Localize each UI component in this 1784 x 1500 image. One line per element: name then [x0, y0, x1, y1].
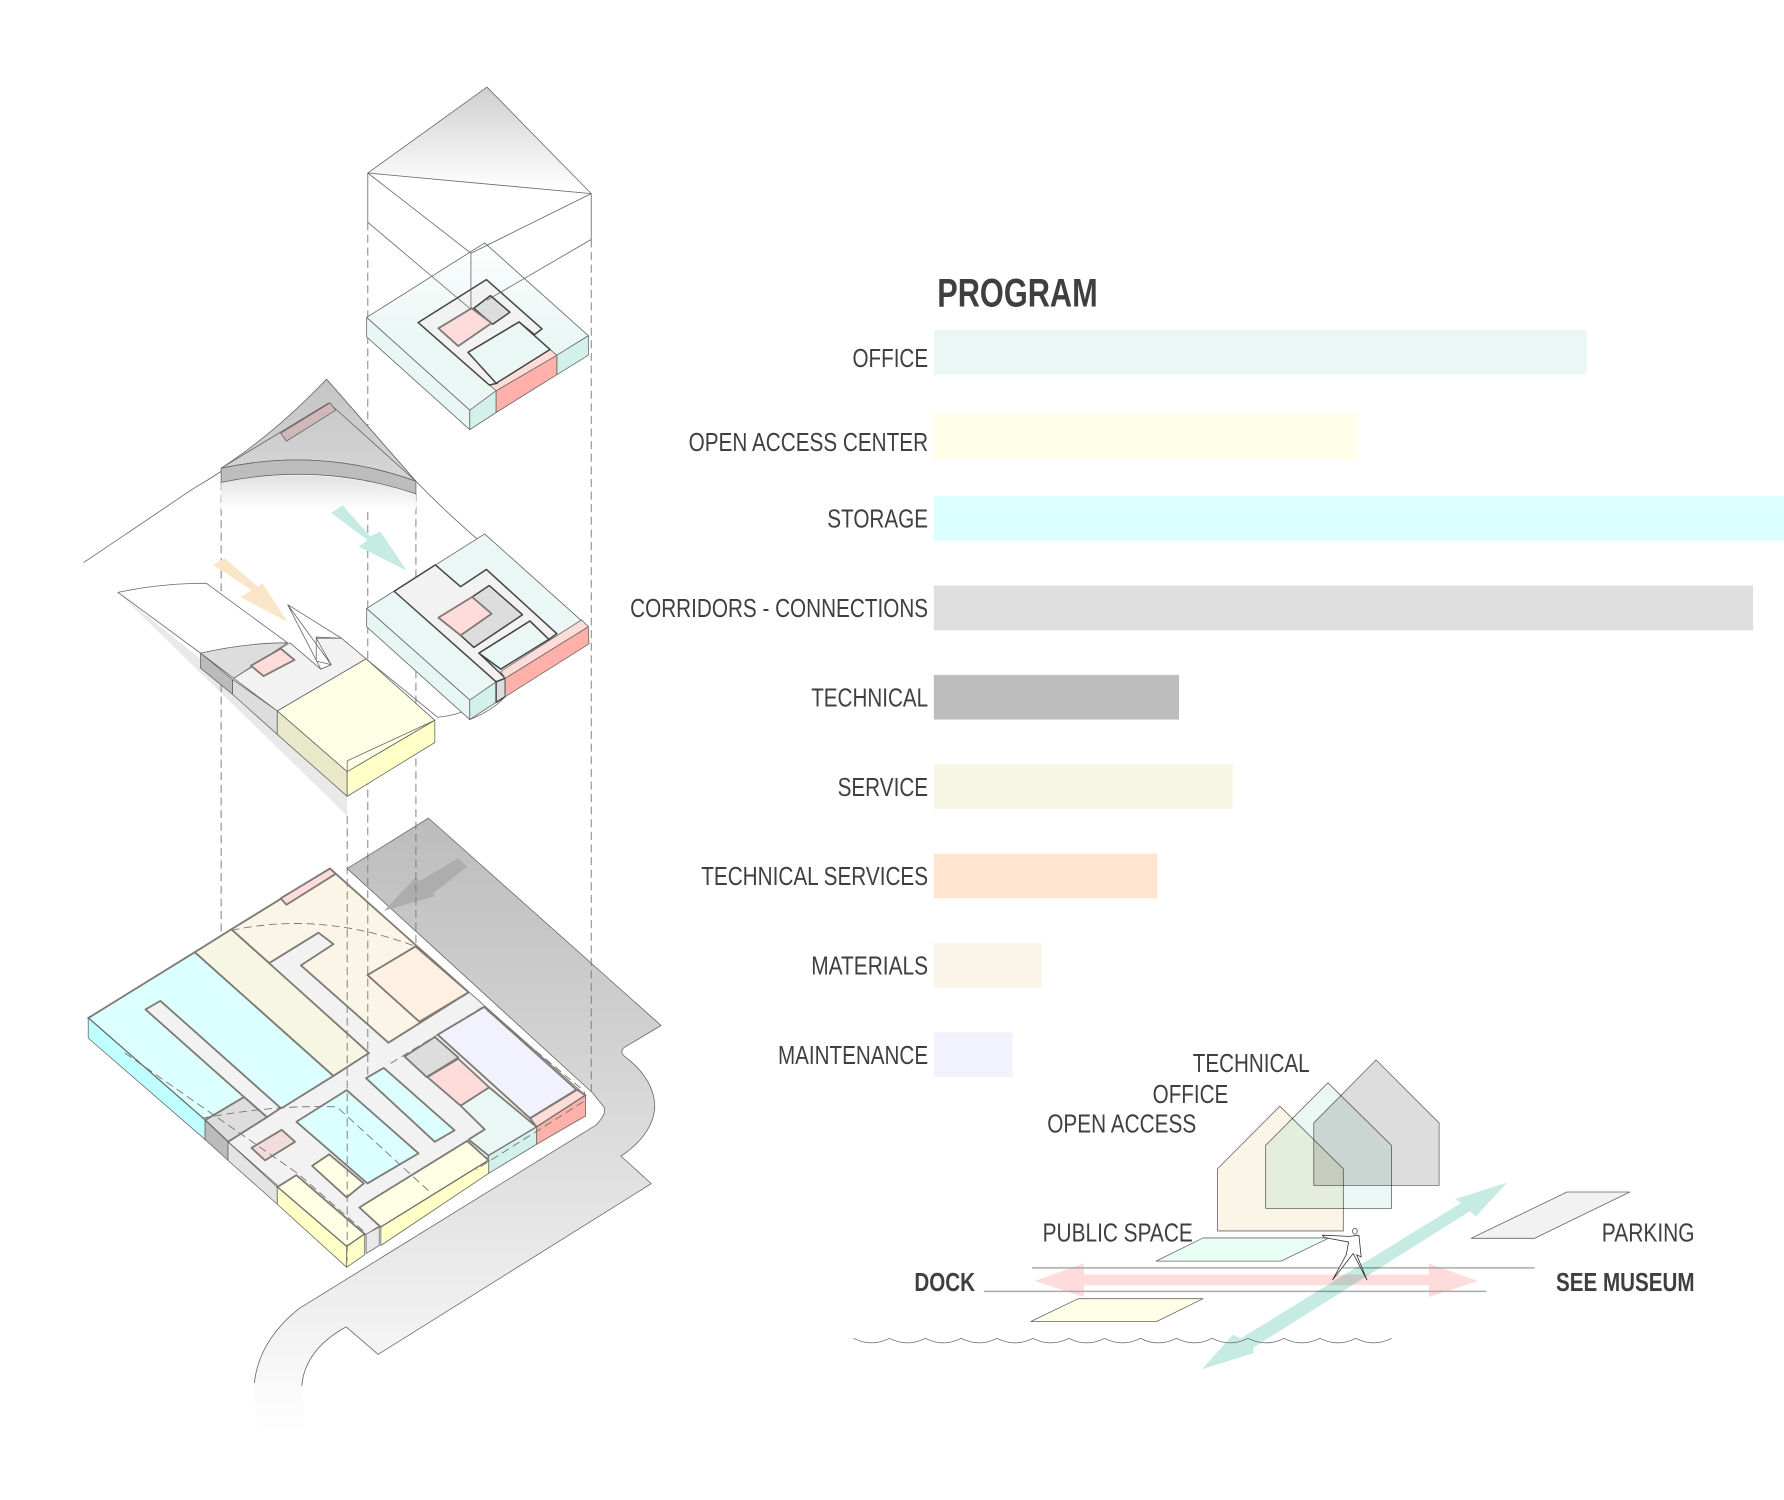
- pink double arrow: [1035, 1263, 1478, 1297]
- label: office: OFFICE: [1153, 1079, 1228, 1109]
- shadow below service block: [118, 592, 347, 816]
- bar: materials: [811, 943, 1042, 988]
- roof sheet outline: [118, 583, 288, 653]
- house: technical: [1314, 1060, 1439, 1185]
- teal double arrow: [1202, 1182, 1507, 1369]
- roof top face: [221, 379, 416, 481]
- road and parking ground: [254, 818, 661, 1432]
- roof apex: [368, 87, 591, 194]
- section concept diagram: [854, 1048, 1695, 1369]
- middle roof shell: [84, 379, 485, 563]
- office zone: [461, 1087, 537, 1156]
- middle office block: [367, 534, 589, 720]
- bar: technical: TECHNICAL: [811, 682, 928, 712]
- label: parking: PARKING: [1602, 1218, 1695, 1248]
- red side: [505, 627, 589, 697]
- pink room: [427, 1059, 489, 1106]
- bar: technical services: TECHNICAL SERVICES: [701, 861, 928, 891]
- red side face: [537, 1095, 586, 1144]
- roof inner line: [221, 403, 416, 481]
- storage side face: [88, 1018, 205, 1140]
- yellow top: [277, 659, 435, 772]
- bar: storage: [827, 496, 1784, 541]
- bar: corridors: [630, 586, 1753, 630]
- parking plane: [1471, 1192, 1630, 1238]
- open access room: [312, 1154, 364, 1197]
- grey side: [496, 678, 505, 702]
- corridor inside storage: [146, 1001, 281, 1117]
- bar: service: SERVICE: [838, 772, 928, 802]
- top roof and office volume: [367, 87, 591, 430]
- khaki side: [277, 711, 347, 796]
- left side: [367, 608, 470, 720]
- connecting lines: [347, 659, 470, 772]
- front side: [470, 682, 496, 720]
- technical services zone: [367, 946, 469, 1022]
- technical small room: [404, 1037, 458, 1077]
- storage zone: [88, 952, 333, 1120]
- dashed vertical projection lines: [221, 222, 591, 1260]
- office room: [479, 621, 549, 669]
- technical room: [205, 1097, 267, 1142]
- label: public space: PUBLIC SPACE: [1043, 1218, 1193, 1248]
- bar: materials: MATERIALS: [811, 951, 928, 981]
- dock plane: [1031, 1299, 1203, 1321]
- bar: corridors: CORRIDORS - CONNECTIONS: [630, 593, 928, 623]
- soft shading under shell: [221, 475, 416, 510]
- top slab side faces: [367, 317, 470, 430]
- roof frame lines: [368, 173, 591, 309]
- public space plane: [1156, 1238, 1329, 1261]
- bar: maintenance: MAINTENANCE: [778, 1040, 928, 1070]
- corridor: [394, 565, 557, 682]
- slab face: [367, 534, 588, 700]
- label: technical: TECHNICAL: [1193, 1048, 1310, 1078]
- bar: open access center: OPEN ACCESS CENTER: [689, 427, 928, 457]
- office side face: [489, 1127, 537, 1173]
- human figure: [1322, 1228, 1367, 1280]
- bar: technical: [811, 675, 1179, 720]
- arrow: service access over parking: [384, 858, 467, 911]
- roof outline: [84, 379, 485, 563]
- zigzag folded skylight: [288, 605, 341, 669]
- light corridor top: [234, 638, 366, 711]
- title: PROGRAM: [937, 272, 1098, 316]
- label: see museum: SEE MUSEUM: [1556, 1267, 1695, 1297]
- arrow: teal entry: [331, 505, 407, 571]
- bar: open access center: [689, 414, 1358, 459]
- open access block: [118, 583, 470, 796]
- skylight strip: [281, 869, 336, 905]
- corridor side face: [228, 1142, 277, 1204]
- red side: [496, 355, 557, 412]
- arrow: orange entry: [213, 558, 288, 622]
- storage narrow room: [366, 1068, 455, 1142]
- house: open access: [1218, 1106, 1343, 1231]
- grey technical: [461, 586, 522, 647]
- storage central room: [296, 1090, 419, 1183]
- technical room: [474, 296, 510, 324]
- isometric base floor plan: [88, 869, 586, 1267]
- road edges: [984, 1268, 1535, 1291]
- open access corner room: [277, 1175, 365, 1247]
- bar: office: OFFICE: [852, 343, 928, 373]
- pink strip: [489, 349, 557, 391]
- maintenance zone: [438, 1007, 576, 1118]
- pink strip top: [530, 1090, 586, 1127]
- mid side: [233, 679, 277, 734]
- roof band: [221, 460, 416, 494]
- skylight: [281, 403, 336, 441]
- small skylight: [252, 1130, 295, 1160]
- sheet line: [470, 697, 505, 720]
- grey roof part: [201, 643, 288, 678]
- bar chart: program areas: [630, 330, 1784, 1077]
- top slab face: [367, 243, 588, 410]
- pink room: [438, 597, 492, 635]
- bar: technical services: [701, 854, 1157, 898]
- house: office: [1266, 1083, 1391, 1208]
- bar: storage: STORAGE: [827, 504, 928, 534]
- label: dock: DOCK: [914, 1267, 975, 1297]
- dark side: [201, 653, 233, 694]
- service zone: [195, 929, 369, 1076]
- bar: service: [838, 764, 1233, 809]
- yellow side faces: [277, 1187, 347, 1267]
- corridor: [418, 280, 542, 385]
- dashed projection outlines on base: [125, 924, 586, 1232]
- pink room: [438, 308, 492, 346]
- office room: [468, 322, 550, 383]
- floor plate: [88, 869, 586, 1247]
- materials zone: [231, 869, 469, 1043]
- label: open access: OPEN ACCESS: [1047, 1109, 1196, 1139]
- water line: [854, 1338, 1392, 1343]
- open access long room: [359, 1141, 489, 1227]
- bar: maintenance: [778, 1032, 1013, 1077]
- yellow side: [347, 720, 435, 796]
- pink strip: [501, 620, 588, 678]
- pink room: [251, 649, 294, 676]
- technical side face: [205, 1120, 228, 1160]
- bar: office: [852, 330, 1587, 375]
